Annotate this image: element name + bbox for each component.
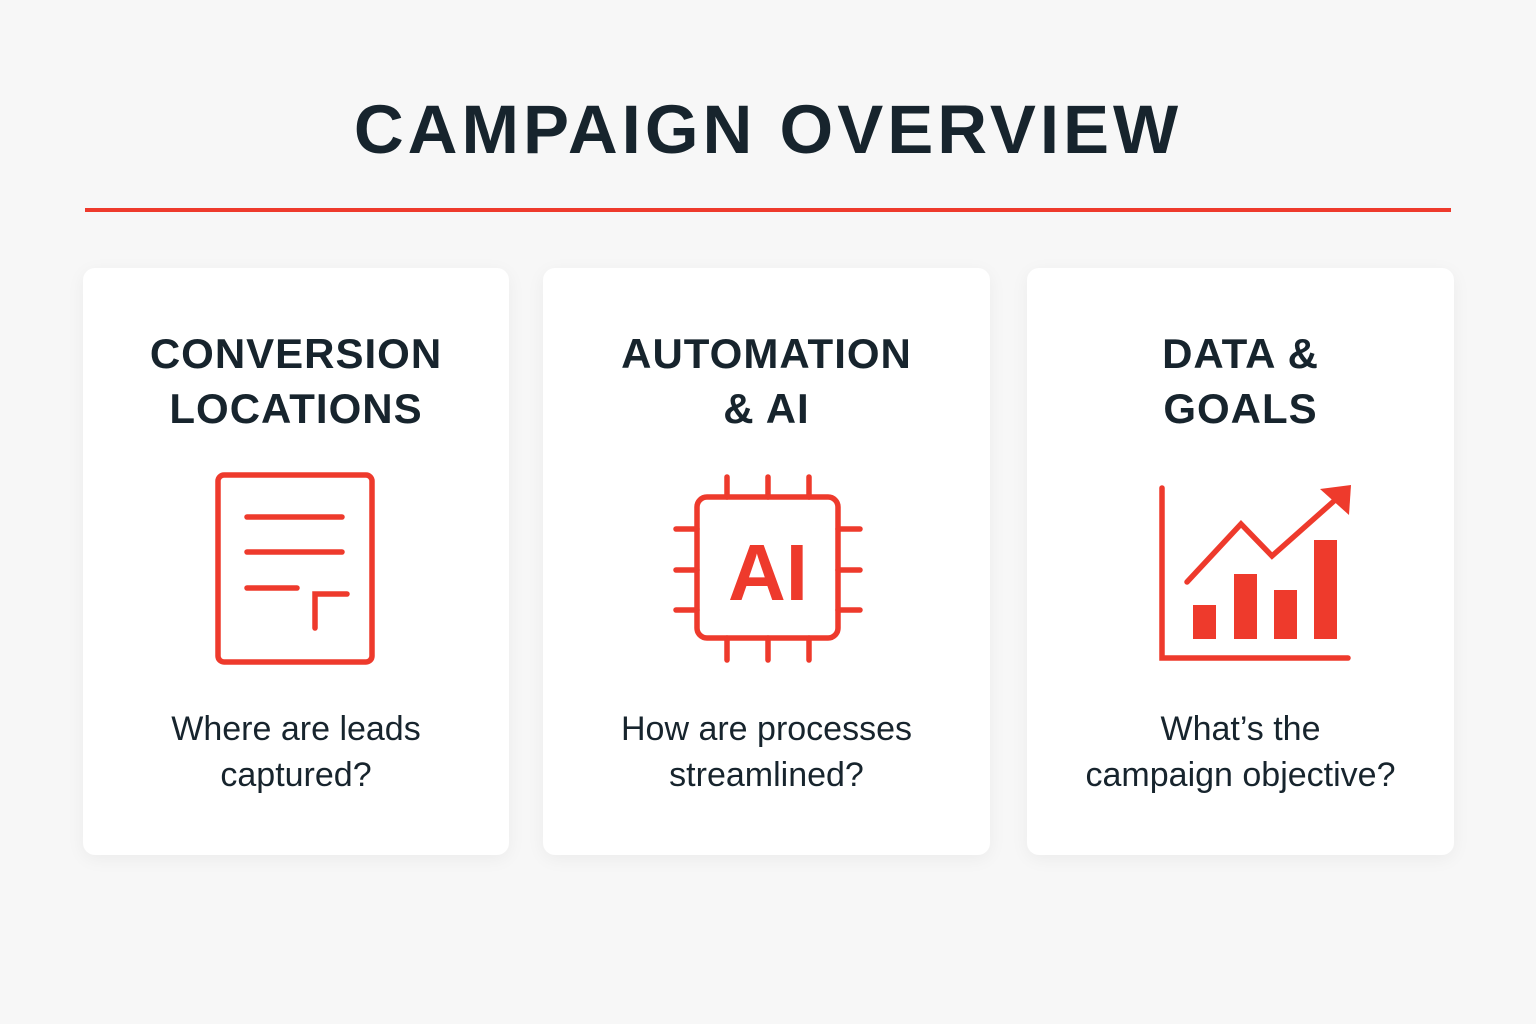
- heading: automation & ai: AUTOMATION: [621, 330, 912, 377]
- heading: data & goals: [1162, 330, 1319, 432]
- question text: What’s the: [1160, 710, 1320, 748]
- heading: conversion locations: CONVERSION: [150, 330, 442, 377]
- heading: automation & ai: [621, 330, 912, 432]
- heading: data & goals: DATA &: [1162, 330, 1319, 377]
- icon: chart: [1159, 485, 1351, 661]
- question text: captured?: [220, 756, 372, 794]
- heading: data & goals: GOALS: [1163, 385, 1318, 432]
- icon: ai chip: [673, 474, 863, 663]
- question text: [1086, 710, 1395, 794]
- question text: [621, 710, 912, 794]
- heading: automation & ai: & AI: [723, 385, 810, 432]
- icon: ai chip: AI: [728, 528, 808, 617]
- heading: conversion locations: [150, 330, 442, 432]
- question text: [171, 710, 421, 794]
- question text: How are processes: [621, 710, 912, 748]
- question text: streamlined?: [669, 756, 864, 794]
- panel: conversion locations: [83, 268, 509, 855]
- heading: conversion locations: LOCATIONS: [169, 385, 423, 432]
- panel: automation & ai: [543, 268, 990, 855]
- icon: document: [215, 472, 375, 665]
- question text: Where are leads: [171, 710, 421, 748]
- title: CAMPAIGN OVERVIEW: [354, 91, 1182, 168]
- question text: campaign objective?: [1086, 756, 1395, 794]
- panel: data & goals: [1027, 268, 1454, 855]
